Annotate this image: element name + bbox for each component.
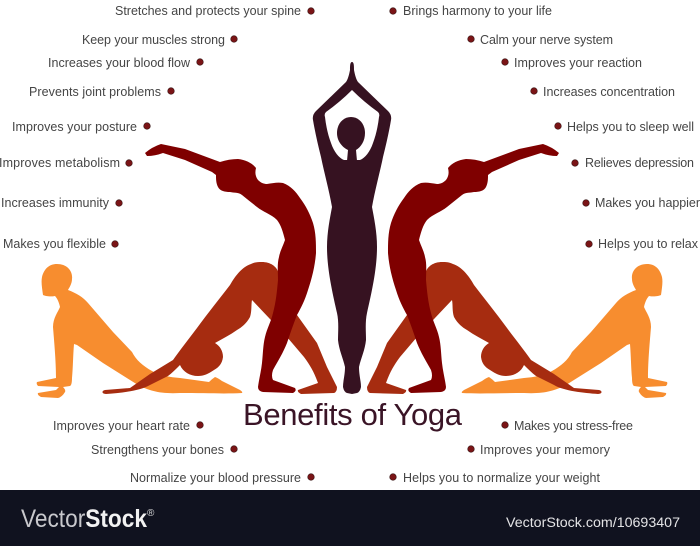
- benefit label: Calm your nerve system: [480, 33, 613, 47]
- benefits left upper list: [0, 4, 314, 251]
- figure: left red standing side bend: [145, 144, 316, 393]
- benefit dot: [112, 241, 118, 247]
- benefit label: Stretches and protects your spine: [115, 4, 301, 18]
- benefits right upper list: [390, 4, 700, 251]
- figure: right dark orange downward dog: [367, 262, 602, 394]
- benefit label: Improves metabolism: [0, 156, 120, 170]
- benefit label: Brings harmony to your life: [403, 4, 552, 18]
- benefit dot: [468, 36, 474, 42]
- benefit label: Normalize your blood pressure: [130, 471, 301, 485]
- figure: left light orange upward dog: [37, 264, 242, 398]
- benefit dot: [168, 88, 174, 94]
- benefit dot: [231, 446, 237, 452]
- benefit label: Improves your reaction: [514, 56, 642, 70]
- title: Benefits of Yoga: [243, 397, 463, 432]
- figure: right red standing side bend: [388, 144, 559, 393]
- benefit dot: [572, 160, 578, 166]
- benefit label: Increases concentration: [543, 85, 675, 99]
- benefit label: Keep your muscles strong: [82, 33, 225, 47]
- benefit label: Prevents joint problems: [29, 85, 161, 99]
- benefit label: Helps you to sleep well: [567, 120, 694, 134]
- footer logo: VectorStock: [21, 505, 147, 533]
- figure: right light orange upward dog: [462, 264, 667, 398]
- benefit label: Helps you to relax: [598, 237, 699, 251]
- benefit label: Improves your heart rate: [53, 419, 190, 433]
- benefits left lower list: [53, 419, 314, 485]
- benefit dot: [555, 123, 561, 129]
- benefit label: Helps you to normalize your weight: [403, 471, 601, 485]
- benefit dot: [144, 123, 150, 129]
- benefit dot: [308, 474, 314, 480]
- benefit label: Makes you flexible: [3, 237, 106, 251]
- benefit dot: [502, 422, 508, 428]
- figure: center standing prayer pose: [313, 62, 391, 394]
- benefit label: Increases your blood flow: [48, 56, 191, 70]
- benefit label: Improves your memory: [480, 443, 611, 457]
- benefit dot: [468, 446, 474, 452]
- footer image id: VectorStock.com/10693407: [506, 515, 680, 530]
- benefit dot: [390, 474, 396, 480]
- figure: center head: [337, 117, 365, 161]
- benefit dot: [531, 88, 537, 94]
- footer registered mark: ®: [147, 508, 155, 519]
- benefit dot: [308, 8, 314, 14]
- benefit label: Relieves depression: [585, 156, 694, 170]
- benefit dot: [126, 160, 132, 166]
- benefit dot: [197, 59, 203, 65]
- benefit label: Improves your posture: [12, 120, 137, 134]
- footer bar: [0, 490, 700, 546]
- benefit dot: [390, 8, 396, 14]
- benefit label: Makes you happier: [595, 196, 700, 210]
- benefits right lower list: [390, 419, 633, 485]
- benefit dot: [502, 59, 508, 65]
- figure: left dark orange downward dog: [102, 262, 337, 394]
- yoga figures: [37, 62, 667, 398]
- benefit dot: [586, 241, 592, 247]
- benefit dot: [197, 422, 203, 428]
- benefit label: Strengthens your bones: [91, 443, 224, 457]
- benefit label: Increases immunity: [1, 196, 110, 210]
- benefit label: Makes you stress-free: [514, 419, 633, 433]
- benefit dot: [583, 200, 589, 206]
- benefit dot: [231, 36, 237, 42]
- benefit dot: [116, 200, 122, 206]
